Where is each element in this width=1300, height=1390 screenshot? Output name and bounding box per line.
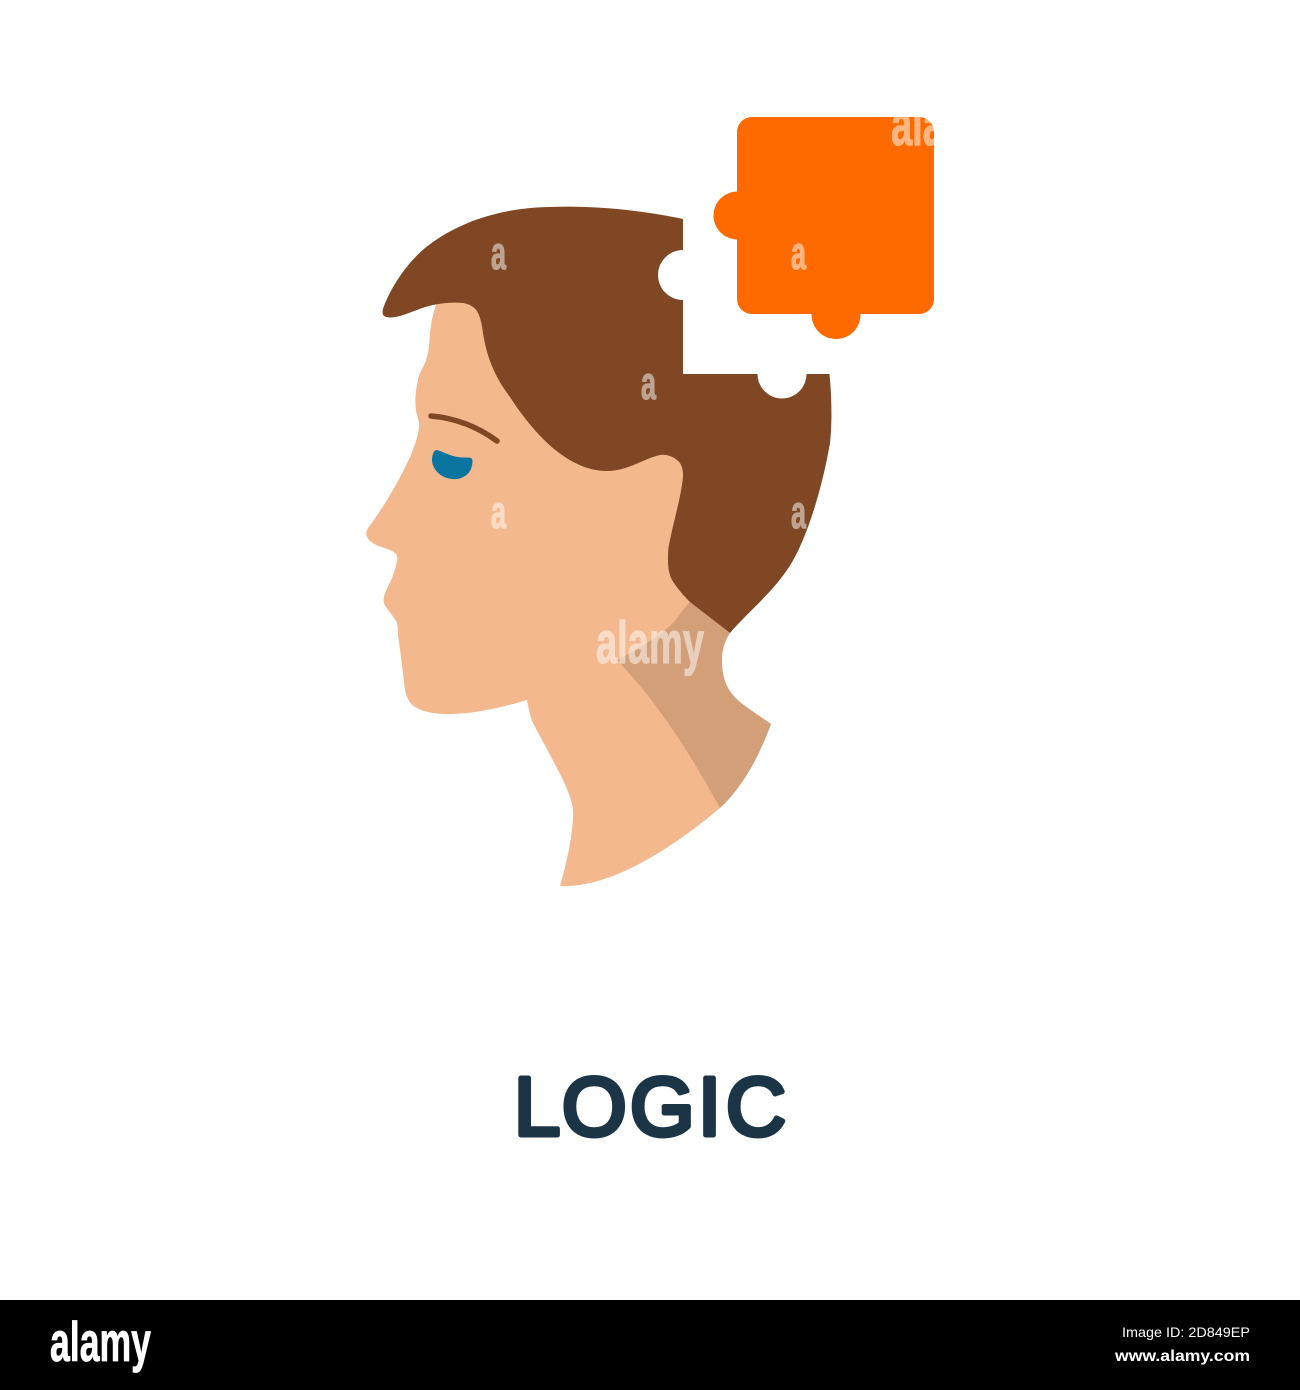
watermarks: a — [791, 486, 806, 538]
face and neck — [366, 290, 720, 886]
watermarks: alamy — [891, 92, 999, 158]
hair — [382, 207, 831, 633]
watermarks: a — [491, 486, 506, 538]
footer bar — [0, 1300, 1300, 1390]
watermarks: alamy — [596, 610, 704, 676]
website: www.alamy.com — [1114, 1348, 1250, 1365]
neck shadow — [617, 602, 771, 808]
icon: head with puzzle piece — [366, 117, 934, 886]
eyebrow — [431, 416, 497, 441]
eye — [432, 450, 472, 479]
title: LOGIC — [514, 1060, 786, 1153]
watermarks — [491, 92, 999, 676]
watermarks: a — [491, 227, 506, 279]
watermarks: a — [641, 357, 656, 409]
watermarks: a — [791, 227, 806, 279]
footer logo: alamy — [50, 1310, 151, 1373]
image id: Image ID: 2D849EP — [1122, 1324, 1250, 1340]
puzzle piece — [714, 117, 934, 339]
